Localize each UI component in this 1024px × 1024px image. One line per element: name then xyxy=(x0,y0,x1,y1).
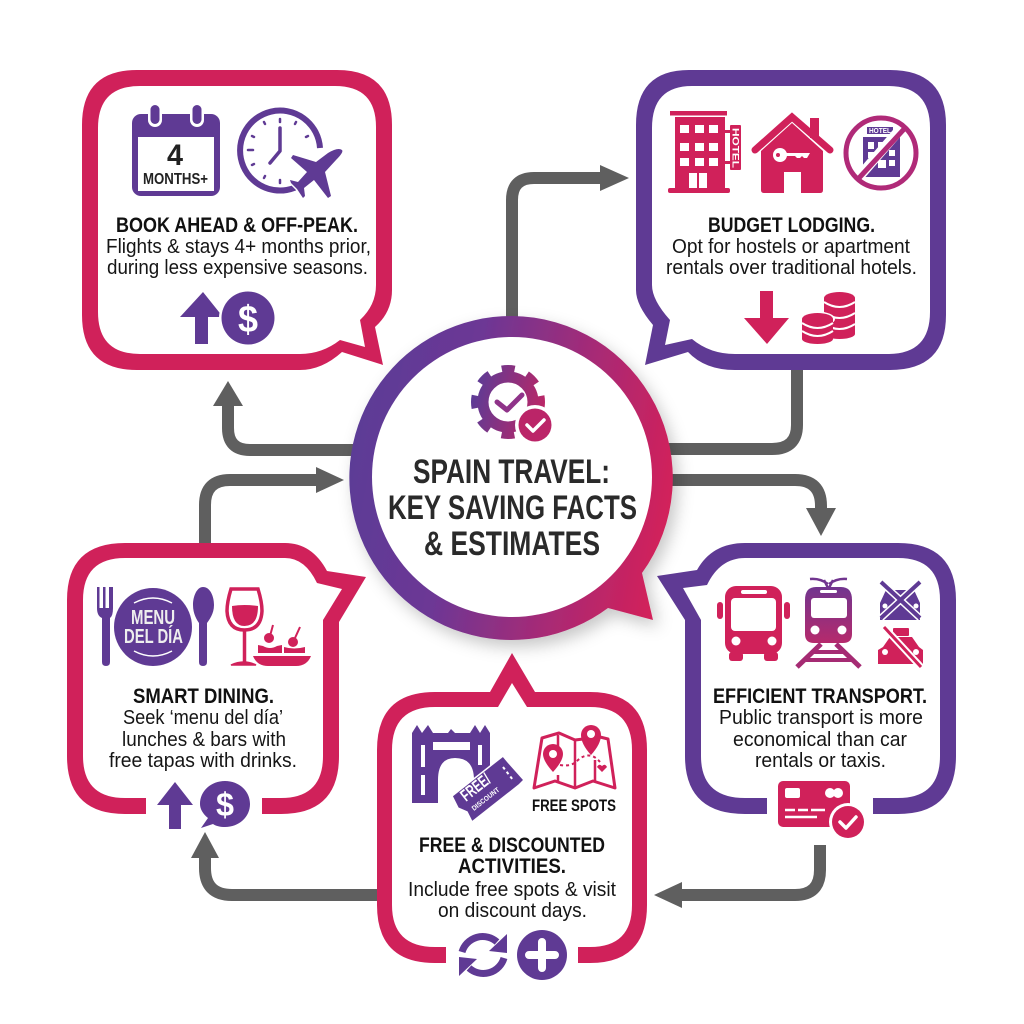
icon: bus xyxy=(717,586,790,661)
title xyxy=(388,453,637,563)
ring and tail xyxy=(349,316,673,640)
body text: Flights & stays 4+ months prior, xyxy=(106,235,371,258)
icon: tram xyxy=(797,579,860,667)
body text: lunches & bars with xyxy=(122,728,286,751)
icon: wine glass xyxy=(227,589,262,665)
heading xyxy=(419,834,605,878)
body text: rentals over traditional hotels. xyxy=(666,256,917,279)
body text xyxy=(106,235,371,279)
panel: budget lodging xyxy=(636,70,946,370)
icon: clock and plane xyxy=(240,111,342,198)
free spots label: FREE SPOTS xyxy=(532,796,616,815)
icon: car crossed out xyxy=(880,582,920,620)
panel frame xyxy=(657,543,956,814)
body text xyxy=(666,235,917,279)
body text: Seek ‘menu del día’ xyxy=(123,706,283,729)
panel frame xyxy=(82,70,392,370)
icon: arrow up and dollar: $ xyxy=(238,299,258,341)
panel: free and discounted activities xyxy=(377,653,647,980)
icon: triumphal arch xyxy=(412,725,490,803)
icon: plus circle xyxy=(517,930,567,980)
icon: payment card with check xyxy=(778,781,867,841)
icon: tapas xyxy=(253,625,311,666)
body text: Public transport is more xyxy=(719,706,923,729)
body text: economical than car xyxy=(733,728,907,751)
icon: hotel building xyxy=(668,111,741,193)
icon: fork xyxy=(97,587,113,666)
icon: arrow up and dollar xyxy=(180,289,277,347)
body text: Include free spots & visit xyxy=(408,878,616,901)
icon: taxi crossed out xyxy=(878,627,923,667)
icon: calendar xyxy=(132,103,220,196)
heading: BOOK AHEAD & OFF-PEAK. xyxy=(116,214,358,237)
body text: during less expensive seasons. xyxy=(107,256,368,279)
panel: efficient transport xyxy=(657,543,956,841)
icon: arrow up xyxy=(157,782,193,829)
panel: book ahead and off-peak xyxy=(82,70,392,370)
body text xyxy=(408,878,616,922)
arrow: centre to book ahead xyxy=(213,381,355,450)
arrow: smart dining to centre xyxy=(205,467,344,545)
icon: free ticket: FREE/ xyxy=(457,770,495,805)
icon: map with pins xyxy=(534,725,615,788)
panel frame xyxy=(377,653,647,963)
panel frame xyxy=(636,70,946,370)
bubble interior xyxy=(372,337,652,617)
icon: house with key xyxy=(755,117,830,193)
icon: calendar: 4 xyxy=(167,139,183,172)
arrow: budget lodging to centre xyxy=(665,368,797,449)
icon: down arrow xyxy=(744,291,789,344)
body text xyxy=(109,706,297,772)
icon: menu del dia plate: DEL DÍA xyxy=(124,625,183,648)
arrow: centre to efficient transport xyxy=(670,480,836,536)
icon: menu del dia plate xyxy=(114,588,192,666)
body text: on discount days. xyxy=(438,899,587,922)
body text: free tapas with drinks. xyxy=(109,749,297,772)
icon: coin stacks xyxy=(800,292,855,344)
icon: dollar speech bubble xyxy=(200,781,250,828)
icon: gear with check marks xyxy=(474,368,555,445)
arrow: efficient transport to free activities xyxy=(654,845,820,908)
icon: spoon xyxy=(193,587,214,666)
panel frame xyxy=(67,543,366,814)
icon: menu del dia plate: MENU xyxy=(131,607,175,629)
body text: rentals or taxis. xyxy=(755,749,886,772)
icon: dollar speech bubble: $ xyxy=(216,786,234,823)
icon: calendar: MONTHS+ xyxy=(143,171,208,188)
icon: no hotel: HOTEL xyxy=(869,128,892,135)
heading: BUDGET LODGING. xyxy=(708,214,875,237)
heading: FREE & DISCOUNTED xyxy=(419,834,605,857)
centre bubble xyxy=(349,316,673,640)
heading: ACTIVITIES. xyxy=(458,855,566,878)
title: & ESTIMATES xyxy=(424,525,600,563)
icon: free ticket xyxy=(452,756,524,822)
icon: hotel building: HOTEL xyxy=(730,128,740,169)
icon: refresh arrows xyxy=(459,934,507,976)
heading: SMART DINING. xyxy=(133,685,274,708)
arrow: centre to budget lodging xyxy=(512,165,629,325)
heading: EFFICIENT TRANSPORT. xyxy=(713,685,927,708)
arrow: free activities to smart dining xyxy=(191,832,378,895)
body text: Opt for hostels or apartment xyxy=(672,235,910,258)
body text xyxy=(719,706,923,772)
title: SPAIN TRAVEL: xyxy=(413,453,610,491)
panel: smart dining xyxy=(67,543,366,829)
icon: no hotel xyxy=(846,118,916,188)
title: KEY SAVING FACTS xyxy=(388,489,637,527)
icon: free ticket: DISCOUNT xyxy=(471,786,502,813)
